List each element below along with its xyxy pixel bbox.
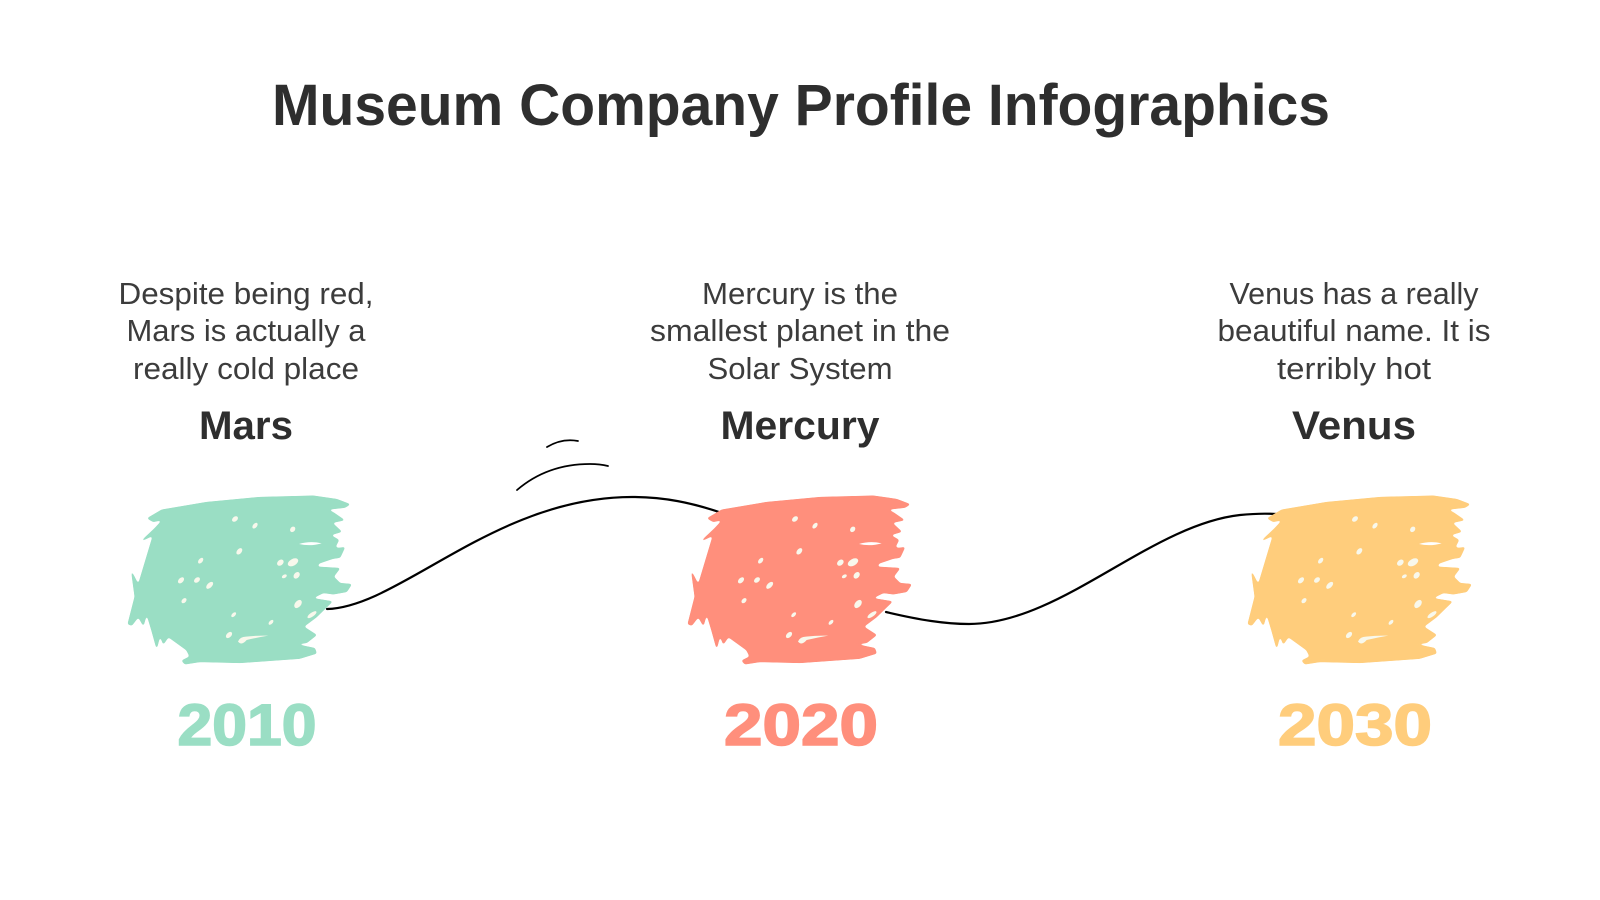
title: Museum Company Profile Infographics (272, 73, 1330, 138)
Venus description: Venus has a really (1230, 276, 1479, 311)
Venus description: beautiful name. It is (1218, 313, 1490, 348)
Venus description (1218, 276, 1490, 386)
Venus description: terribly hot (1277, 351, 1431, 386)
icon: yellow paint brush blob (1248, 496, 1471, 664)
year 2010: 2010 (178, 693, 316, 758)
panel: Mercury (650, 276, 950, 758)
Mars description: Despite being red, (118, 276, 374, 311)
Mars description: Mars is actually a (126, 313, 366, 348)
panel: Venus (1218, 276, 1490, 758)
icon: coral paint brush blob (688, 496, 911, 664)
Mercury description: Solar System (708, 351, 892, 386)
year 2020: 2020 (724, 693, 878, 758)
Mercury description (650, 276, 950, 386)
decorative motion arcs (517, 440, 608, 490)
Mercury description: smallest planet in the (650, 313, 950, 348)
Venus heading: Venus (1292, 404, 1416, 448)
Mars description (118, 276, 374, 386)
icon: mint paint brush blob (128, 496, 351, 664)
panel: Mars (118, 276, 374, 758)
year 2030: 2030 (1278, 693, 1432, 758)
Mars heading: Mars (199, 404, 293, 448)
connector line: Mars to Mercury (327, 497, 719, 609)
Mercury description: Mercury is the (702, 276, 898, 311)
Mercury heading: Mercury (720, 404, 880, 448)
Mars description: really cold place (133, 351, 359, 386)
connector line: Mercury to Venus (886, 514, 1276, 624)
